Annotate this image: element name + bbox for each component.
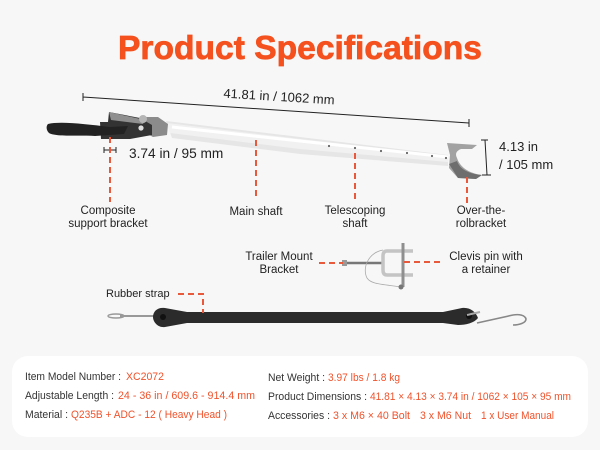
spec: model number: Item Model Number :: [25, 371, 121, 383]
callout: telescoping shaft: shaft: [343, 218, 368, 230]
callout: trailer mount bracket: Trailer Mount: [245, 251, 313, 263]
spec: accessories: 3 x M6 × 40 Bolt: [333, 410, 410, 422]
callout: trailer mount bracket: Bracket: [260, 264, 299, 276]
callout: trailer mount bracket: [245, 251, 343, 276]
callout: composite support bracket: Composite: [81, 205, 135, 217]
callout: rubber strap: Rubber strap: [106, 288, 170, 300]
rubber strap: [108, 308, 526, 327]
callout: over-the-roll bracket: Over-the-: [457, 205, 505, 217]
spec: accessories: [268, 410, 554, 422]
dimension: head width: 3.74 in / 95 mm: [129, 146, 223, 161]
black strap handle: [47, 123, 128, 136]
trailer mount bracket and clevis pin: [342, 243, 413, 290]
callout: composite support bracket: [68, 137, 148, 230]
spec: adjustable length: 24 - 36 in / 609.6 - 914.4 mm: [118, 390, 255, 402]
over-the-roll bracket: [447, 143, 482, 179]
spec: model number: XC2072: [126, 371, 164, 383]
spec: net weight: 3.97 lbs / 1.8 kg: [328, 372, 400, 384]
ratchet bracket: [100, 112, 152, 139]
telescoping shaft holes: [328, 145, 447, 159]
spec: dimensions: Product Dimensions :: [268, 391, 367, 403]
composite head: [140, 117, 168, 137]
spec: net weight: Net Weight :: [268, 372, 325, 384]
product: tensioner arm: [47, 112, 448, 166]
callout: over-the-roll bracket: rolbracket: [456, 218, 507, 230]
dimension: bracket height: [481, 139, 553, 175]
callout: main shaft: [229, 140, 283, 218]
spec: net weight: [268, 372, 400, 384]
panel: specifications: [12, 356, 588, 437]
spec: accessories: 3 x M6 Nut: [420, 410, 471, 422]
spec: accessories: 1 x User Manual: [481, 410, 554, 422]
callout: clevis pin: a retainer: [462, 264, 510, 276]
spec: dimensions: [268, 391, 571, 403]
dimension: bracket height: / 105 mm: [499, 157, 553, 172]
callout: clevis pin: Clevis pin with: [449, 251, 523, 263]
callout: composite support bracket: support bracket: [68, 218, 148, 230]
spec: dimensions: 41.81 × 4.13 × 3.74 in / 1062 × 105 × 95 mm: [370, 391, 571, 403]
spec: adjustable length: [25, 390, 255, 402]
spec: adjustable length: Adjustable Length :: [25, 390, 114, 402]
dimension: overall length: [83, 86, 469, 127]
dimension: bracket height: 4.13 in: [499, 139, 538, 154]
spec: accessories: Accessories :: [268, 410, 330, 422]
callout: clevis pin: [404, 251, 523, 276]
spec: material: Q235B + ADC - 12 ( Heavy Head ): [71, 409, 227, 421]
callout: telescoping shaft: Telescoping: [325, 205, 385, 217]
title: Product Specifications: [118, 29, 482, 66]
main shaft: [166, 121, 448, 166]
callout: main shaft: Main shaft: [229, 206, 283, 218]
callout: telescoping shaft: [325, 153, 385, 230]
dimension: overall length: 41.81 in / 1062 mm: [223, 86, 335, 107]
callout: over-the-roll bracket: [456, 177, 507, 230]
callout: rubber strap: [106, 288, 203, 313]
spec: material: Material :: [25, 409, 68, 421]
